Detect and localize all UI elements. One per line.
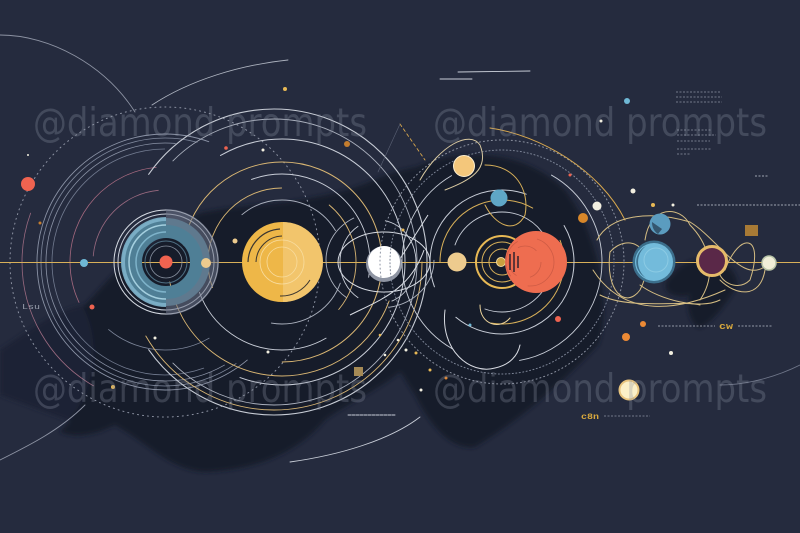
planet: small blue: [490, 190, 508, 206]
right orbit tangle: [593, 211, 770, 306]
planet: cream on axis: [448, 252, 466, 272]
small labels and code marks: [22, 92, 800, 422]
horizontal axis line: [0, 262, 800, 264]
planet: gold: [242, 222, 323, 302]
planet: gold ring target: [476, 236, 528, 288]
planet: maroon with gold ring: [698, 246, 726, 276]
planet: blue ringed: [114, 210, 218, 314]
planet: red core: [160, 256, 172, 268]
planet: coral: [505, 231, 567, 293]
planet: pale right: [762, 256, 776, 270]
white planet rings: [326, 212, 434, 315]
planet: cream top: [454, 156, 474, 176]
watermarks: @diamond prompts: [33, 101, 367, 146]
cluster 1: left concentric orbits: [10, 107, 320, 417]
watermarks: @diamond prompts: [33, 367, 367, 412]
cluster 3: right central orbits: [380, 128, 625, 384]
small labels and code marks: cw: [719, 322, 734, 332]
planet: upper blue: [650, 214, 670, 234]
scattered dots: [27, 87, 674, 400]
small labels and code marks: c8n: [581, 413, 599, 422]
cluster 2: central large orbits: [121, 109, 427, 415]
small labels and code marks: Lsu: [22, 304, 40, 312]
watermarks: [33, 101, 767, 412]
pattern squares: [745, 225, 758, 236]
white planet: [366, 246, 402, 282]
moon dots on axis left: [21, 177, 238, 310]
dark shadow blobs: [0, 155, 738, 472]
planet: large blue: [632, 240, 676, 284]
